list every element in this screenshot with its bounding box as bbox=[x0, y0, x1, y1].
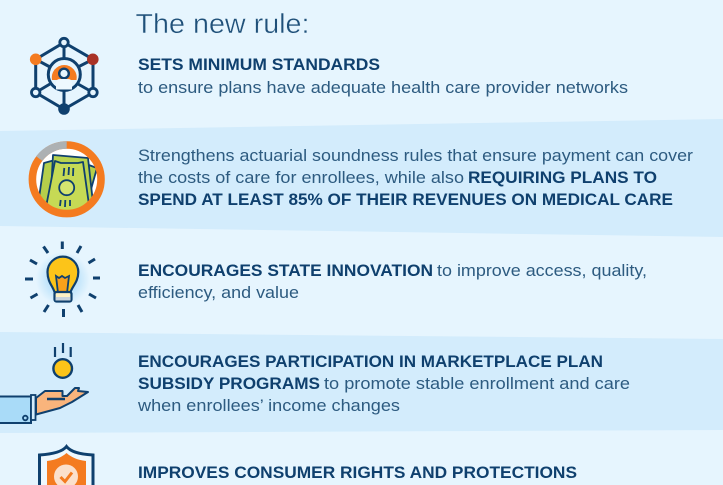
text: actuarial soundness: the costs of care for enrollees, while also bbox=[138, 169, 464, 187]
icon: light bulb bbox=[25, 242, 100, 317]
text: minimum standards bbox=[138, 56, 628, 97]
text: actuarial soundness: SPEND AT LEAST 85% OF THEIR REVENUES ON MEDICAL CARE bbox=[138, 191, 673, 209]
text: state innovation: efficiency, and value bbox=[138, 284, 299, 302]
title: The new rule: bbox=[136, 8, 310, 39]
icon: 85 percent ring with money bbox=[32, 145, 101, 214]
text: state innovation bbox=[138, 262, 647, 302]
text: minimum standards: SETS MINIMUM STANDARDS bbox=[138, 56, 380, 74]
text: actuarial soundness: REQUIRING PLANS TO bbox=[468, 169, 657, 187]
text: minimum standards: to ensure plans have adequate health care provider networks bbox=[138, 79, 628, 97]
band: actuarial soundness row bbox=[0, 119, 723, 237]
icon: shield with check bbox=[40, 446, 93, 485]
text: actuarial soundness bbox=[138, 147, 694, 209]
text: state innovation: to improve access, quality, bbox=[437, 262, 647, 280]
icon: hand with coin bbox=[0, 343, 88, 423]
text: marketplace subsidy: when enrollees’ income changes bbox=[137, 397, 400, 415]
text: marketplace subsidy bbox=[137, 353, 630, 415]
text: marketplace subsidy: SUBSIDY PROGRAMS bbox=[138, 375, 320, 393]
band: marketplace subsidy row bbox=[0, 332, 723, 433]
text: consumer rights: IMPROVES CONSUMER RIGHTS AND PROTECTIONS bbox=[138, 464, 577, 482]
icon: provider network bbox=[30, 38, 99, 115]
text: actuarial soundness: Strengthens actuarial soundness rules that ensure payment can cover bbox=[138, 147, 694, 165]
text: state innovation: ENCOURAGES STATE INNOVATION bbox=[138, 262, 433, 280]
text: marketplace subsidy: to promote stable enrollment and care bbox=[324, 375, 630, 393]
text: marketplace subsidy: ENCOURAGES PARTICIPATION IN MARKETPLACE PLAN bbox=[138, 353, 603, 371]
